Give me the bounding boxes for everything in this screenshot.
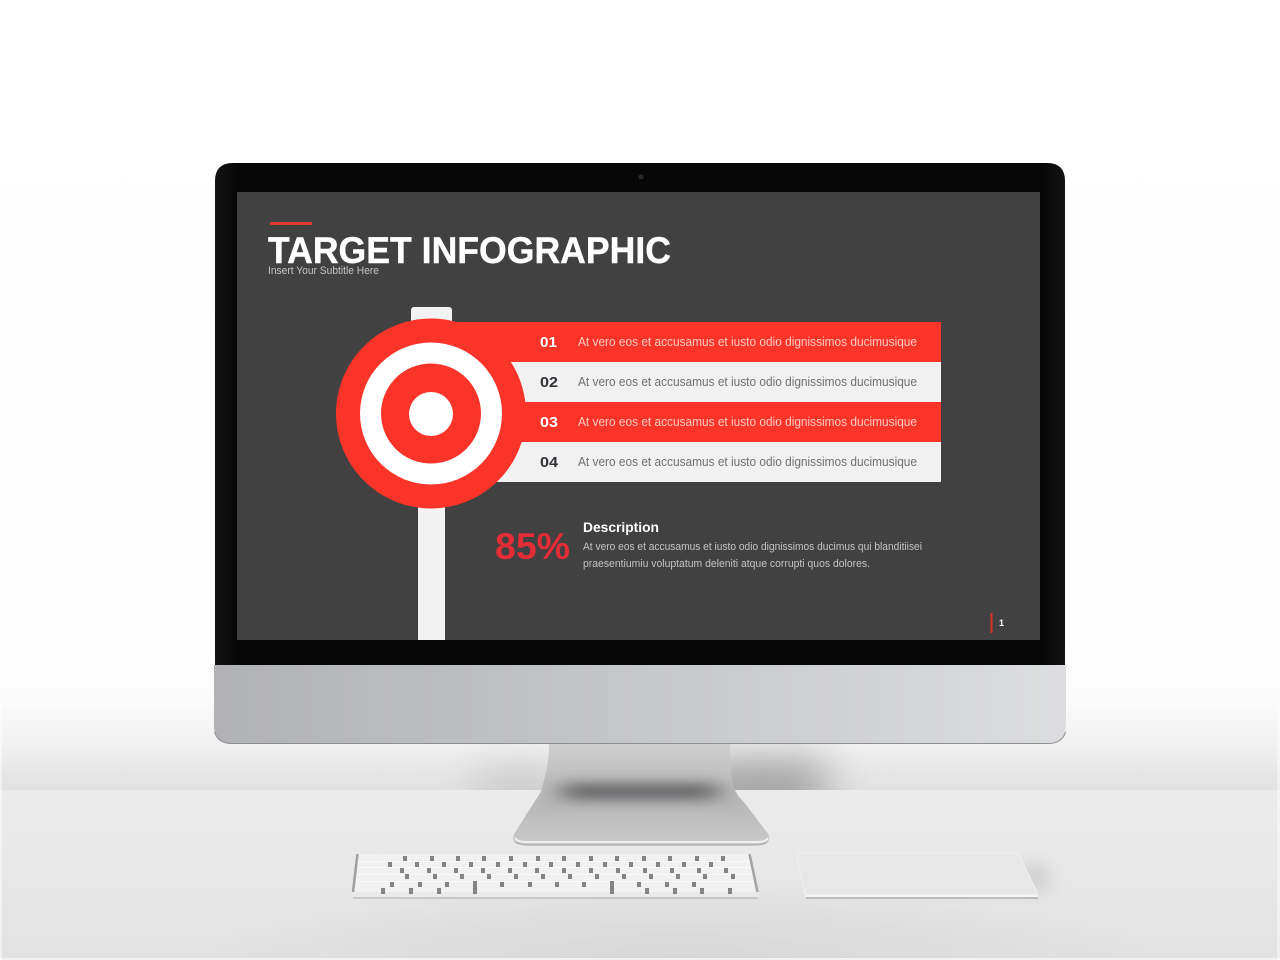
slide screen (237, 192, 1040, 640)
signpost (411, 307, 452, 640)
description text: praesentiumiu voluptatum deleniti atque corrupti quos dolores. (583, 558, 870, 570)
row 02: At vero eos et accusamus et iusto odio dignissimos ducimusique (578, 375, 917, 389)
row 04 (431, 442, 941, 482)
trackpad surface (797, 853, 1037, 895)
row 03: At vero eos et accusamus et iusto odio dignissimos ducimusique (578, 415, 917, 429)
monitor stand (513, 744, 769, 845)
description text (583, 541, 922, 570)
trackpad (797, 853, 1046, 899)
page number: 1 (999, 618, 1004, 628)
row 01: At vero eos et accusamus et iusto odio dignissimos ducimusique (578, 335, 917, 349)
camera (638, 174, 644, 180)
monitor chin (214, 665, 1066, 744)
icon: target (336, 318, 526, 508)
row 01 (431, 322, 941, 362)
row 03 (431, 402, 941, 442)
row 04: 04 (540, 454, 559, 471)
trackpad shadow (1020, 866, 1046, 892)
subtitle: Insert Your Subtitle Here (268, 265, 379, 277)
row 03: 03 (540, 414, 558, 431)
list bars (431, 322, 941, 482)
keyboard body (353, 854, 758, 892)
monitor bezel (215, 163, 1065, 665)
row 02 (431, 362, 941, 402)
title: TARGET INFOGRAPHIC (268, 230, 671, 271)
background: wall and desk (0, 719, 1280, 960)
monitor body (214, 163, 1066, 744)
title accent bar (270, 222, 312, 225)
page number (990, 613, 1004, 633)
key gaps (381, 856, 735, 894)
description text: At vero eos et accusamus et iusto odio dignissimos ducimus qui blanditiisei (583, 541, 922, 553)
stat: 85%: 85% (495, 526, 570, 567)
row 01: 01 (540, 334, 557, 351)
description heading: Description (583, 519, 659, 535)
row 04: At vero eos et accusamus et iusto odio dignissimos ducimusique (578, 455, 917, 469)
keyboard (352, 854, 759, 899)
description block (583, 519, 922, 570)
row 02: 02 (540, 374, 558, 391)
